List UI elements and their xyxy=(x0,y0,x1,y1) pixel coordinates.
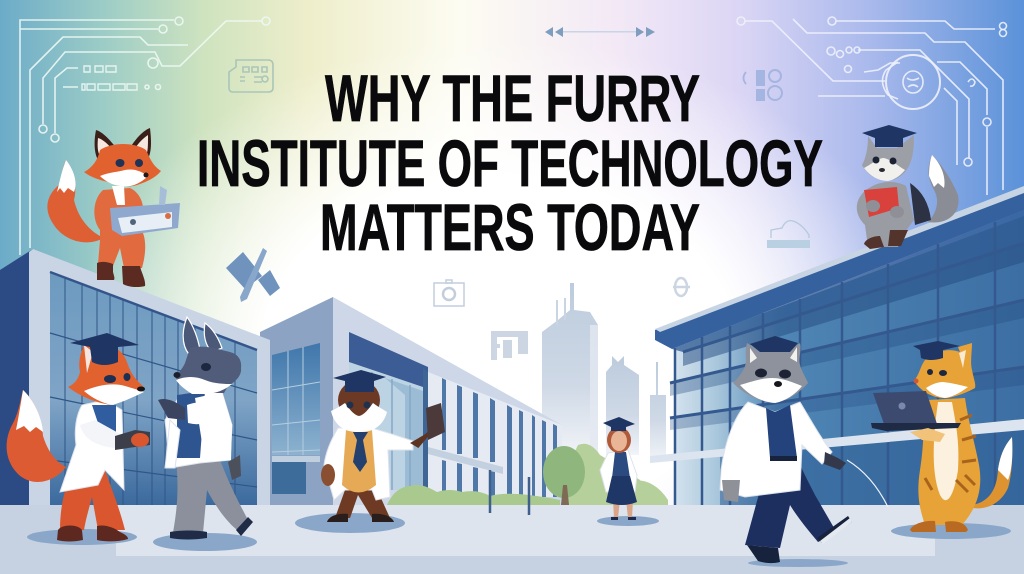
ears xyxy=(183,317,222,357)
hair and face xyxy=(607,427,631,453)
tail xyxy=(7,390,66,482)
title: WHY THE FURRY xyxy=(325,61,700,135)
pouch xyxy=(228,455,241,480)
coat xyxy=(600,450,637,492)
back xyxy=(910,183,931,225)
title xyxy=(197,61,823,264)
trousers xyxy=(173,460,247,533)
shadow xyxy=(597,516,659,526)
legs xyxy=(335,485,390,518)
head xyxy=(176,347,241,393)
shoes xyxy=(747,516,852,563)
shadow xyxy=(153,533,257,551)
centre building louvres xyxy=(423,368,562,497)
title: MATTERS TODAY xyxy=(320,190,700,264)
shirt xyxy=(766,405,797,458)
tie xyxy=(353,432,368,472)
coat xyxy=(60,400,124,492)
building: left xyxy=(0,249,270,505)
arrows icon top centre xyxy=(545,27,655,37)
centre building atrium xyxy=(349,332,428,490)
tablet xyxy=(864,187,899,217)
left building glass xyxy=(50,272,257,505)
coat xyxy=(165,392,232,468)
building: centre xyxy=(260,297,562,505)
cap xyxy=(750,336,798,352)
skirt xyxy=(606,476,637,505)
icon: small tray xyxy=(767,221,810,248)
ground xyxy=(0,470,1024,574)
head xyxy=(862,135,914,181)
head xyxy=(915,343,975,398)
fox head xyxy=(84,144,161,186)
legs xyxy=(613,500,633,518)
wire xyxy=(847,460,888,507)
head xyxy=(338,380,380,420)
legs xyxy=(60,470,125,530)
fox tail xyxy=(47,160,104,242)
trousers xyxy=(745,458,837,548)
icon: link xyxy=(673,278,690,296)
device box xyxy=(110,203,180,236)
belly xyxy=(934,402,958,500)
trees and bushes xyxy=(387,444,668,506)
tail xyxy=(972,437,1012,508)
cap xyxy=(70,333,139,365)
icon: satellite xyxy=(226,248,280,302)
body xyxy=(857,182,914,247)
character: big wolf walking xyxy=(720,336,888,567)
boots xyxy=(57,525,128,542)
vest xyxy=(342,430,376,492)
cap xyxy=(862,125,917,147)
character: grey wolf in lab coat xyxy=(153,317,257,551)
icon: pipes xyxy=(491,331,528,360)
circuit lines top right xyxy=(737,17,1006,195)
shoes xyxy=(170,517,253,540)
shadow xyxy=(295,513,405,533)
shadow xyxy=(27,529,137,545)
icon: target frame xyxy=(434,280,464,306)
stripes xyxy=(925,415,976,492)
icon: chip top left xyxy=(229,60,273,92)
right building mullions xyxy=(670,222,1024,505)
character: brown mascot with book xyxy=(295,370,445,533)
body xyxy=(918,398,980,525)
navy top xyxy=(612,452,630,478)
shadow xyxy=(891,523,1011,539)
hanging coat sleeve xyxy=(165,420,180,468)
icon: machine top right xyxy=(744,70,782,101)
arm xyxy=(910,428,945,442)
shoes xyxy=(327,514,394,522)
cap xyxy=(603,417,635,431)
arm and book xyxy=(413,432,430,446)
shadow xyxy=(748,559,848,567)
character: fox in lab coat xyxy=(7,333,150,545)
boots xyxy=(864,230,908,249)
fox ears xyxy=(95,128,151,162)
coat xyxy=(720,402,832,497)
arm and device xyxy=(80,420,122,448)
centre building left glass tower xyxy=(272,343,320,494)
building: right xyxy=(650,186,1024,505)
lab coat xyxy=(324,428,413,500)
skyline xyxy=(542,283,666,460)
fox body xyxy=(94,188,145,268)
cap xyxy=(333,370,386,392)
fox boots xyxy=(97,262,145,287)
laptop xyxy=(873,391,937,424)
cap xyxy=(913,341,960,360)
tail xyxy=(928,155,959,223)
hands xyxy=(722,480,740,502)
character: student with navy skirt xyxy=(597,417,659,526)
head xyxy=(733,343,808,403)
character: orange cat with laptop xyxy=(871,341,1012,539)
head xyxy=(68,345,145,405)
paws xyxy=(910,521,968,532)
arm and hand xyxy=(187,403,212,424)
character: fox with device on roof xyxy=(47,128,180,287)
character: grey wolf on right roof xyxy=(857,125,959,249)
circuit lines top left xyxy=(20,17,270,255)
